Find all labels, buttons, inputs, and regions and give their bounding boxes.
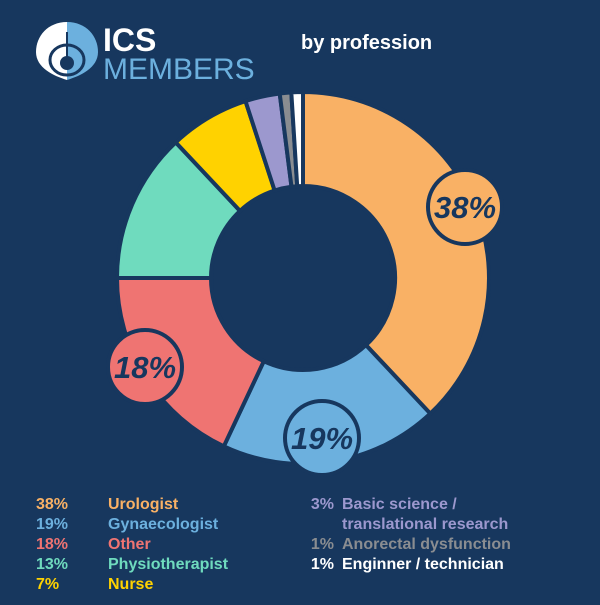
legend: Anorectal dysfunction bbox=[342, 536, 511, 553]
legend: 13% bbox=[36, 556, 68, 573]
legend: 18% bbox=[36, 536, 68, 553]
subtitle: by profession bbox=[301, 32, 432, 54]
donut chart bbox=[117, 92, 489, 464]
legend: 3% bbox=[311, 496, 334, 513]
badge: 38%: 38% bbox=[434, 190, 496, 225]
legend: 1% bbox=[311, 536, 334, 553]
logo bbox=[36, 22, 255, 86]
badge: 19%: 19% bbox=[291, 421, 353, 456]
logo: MEMBERS bbox=[103, 53, 255, 86]
badge: 18% bbox=[108, 330, 182, 404]
legend: Enginner / technician bbox=[342, 556, 504, 573]
badge: 18%: 18% bbox=[114, 350, 176, 385]
legend: 38% bbox=[36, 496, 68, 513]
badge: 19% bbox=[285, 401, 359, 475]
legend: Nurse bbox=[108, 576, 153, 593]
legend: Urologist bbox=[108, 496, 179, 513]
legend: Other bbox=[108, 536, 151, 553]
legend: Basic science / bbox=[342, 496, 457, 513]
legend: 1% bbox=[311, 556, 334, 573]
legend: 7% bbox=[36, 576, 59, 593]
legend: translational research bbox=[342, 516, 508, 533]
legend: Gynaecologist bbox=[108, 516, 219, 533]
legend: 19% bbox=[36, 516, 68, 533]
logo: ICS bbox=[103, 22, 156, 58]
legend bbox=[36, 496, 511, 593]
legend: Physiotherapist bbox=[108, 556, 229, 573]
badge: 38% bbox=[428, 170, 502, 244]
